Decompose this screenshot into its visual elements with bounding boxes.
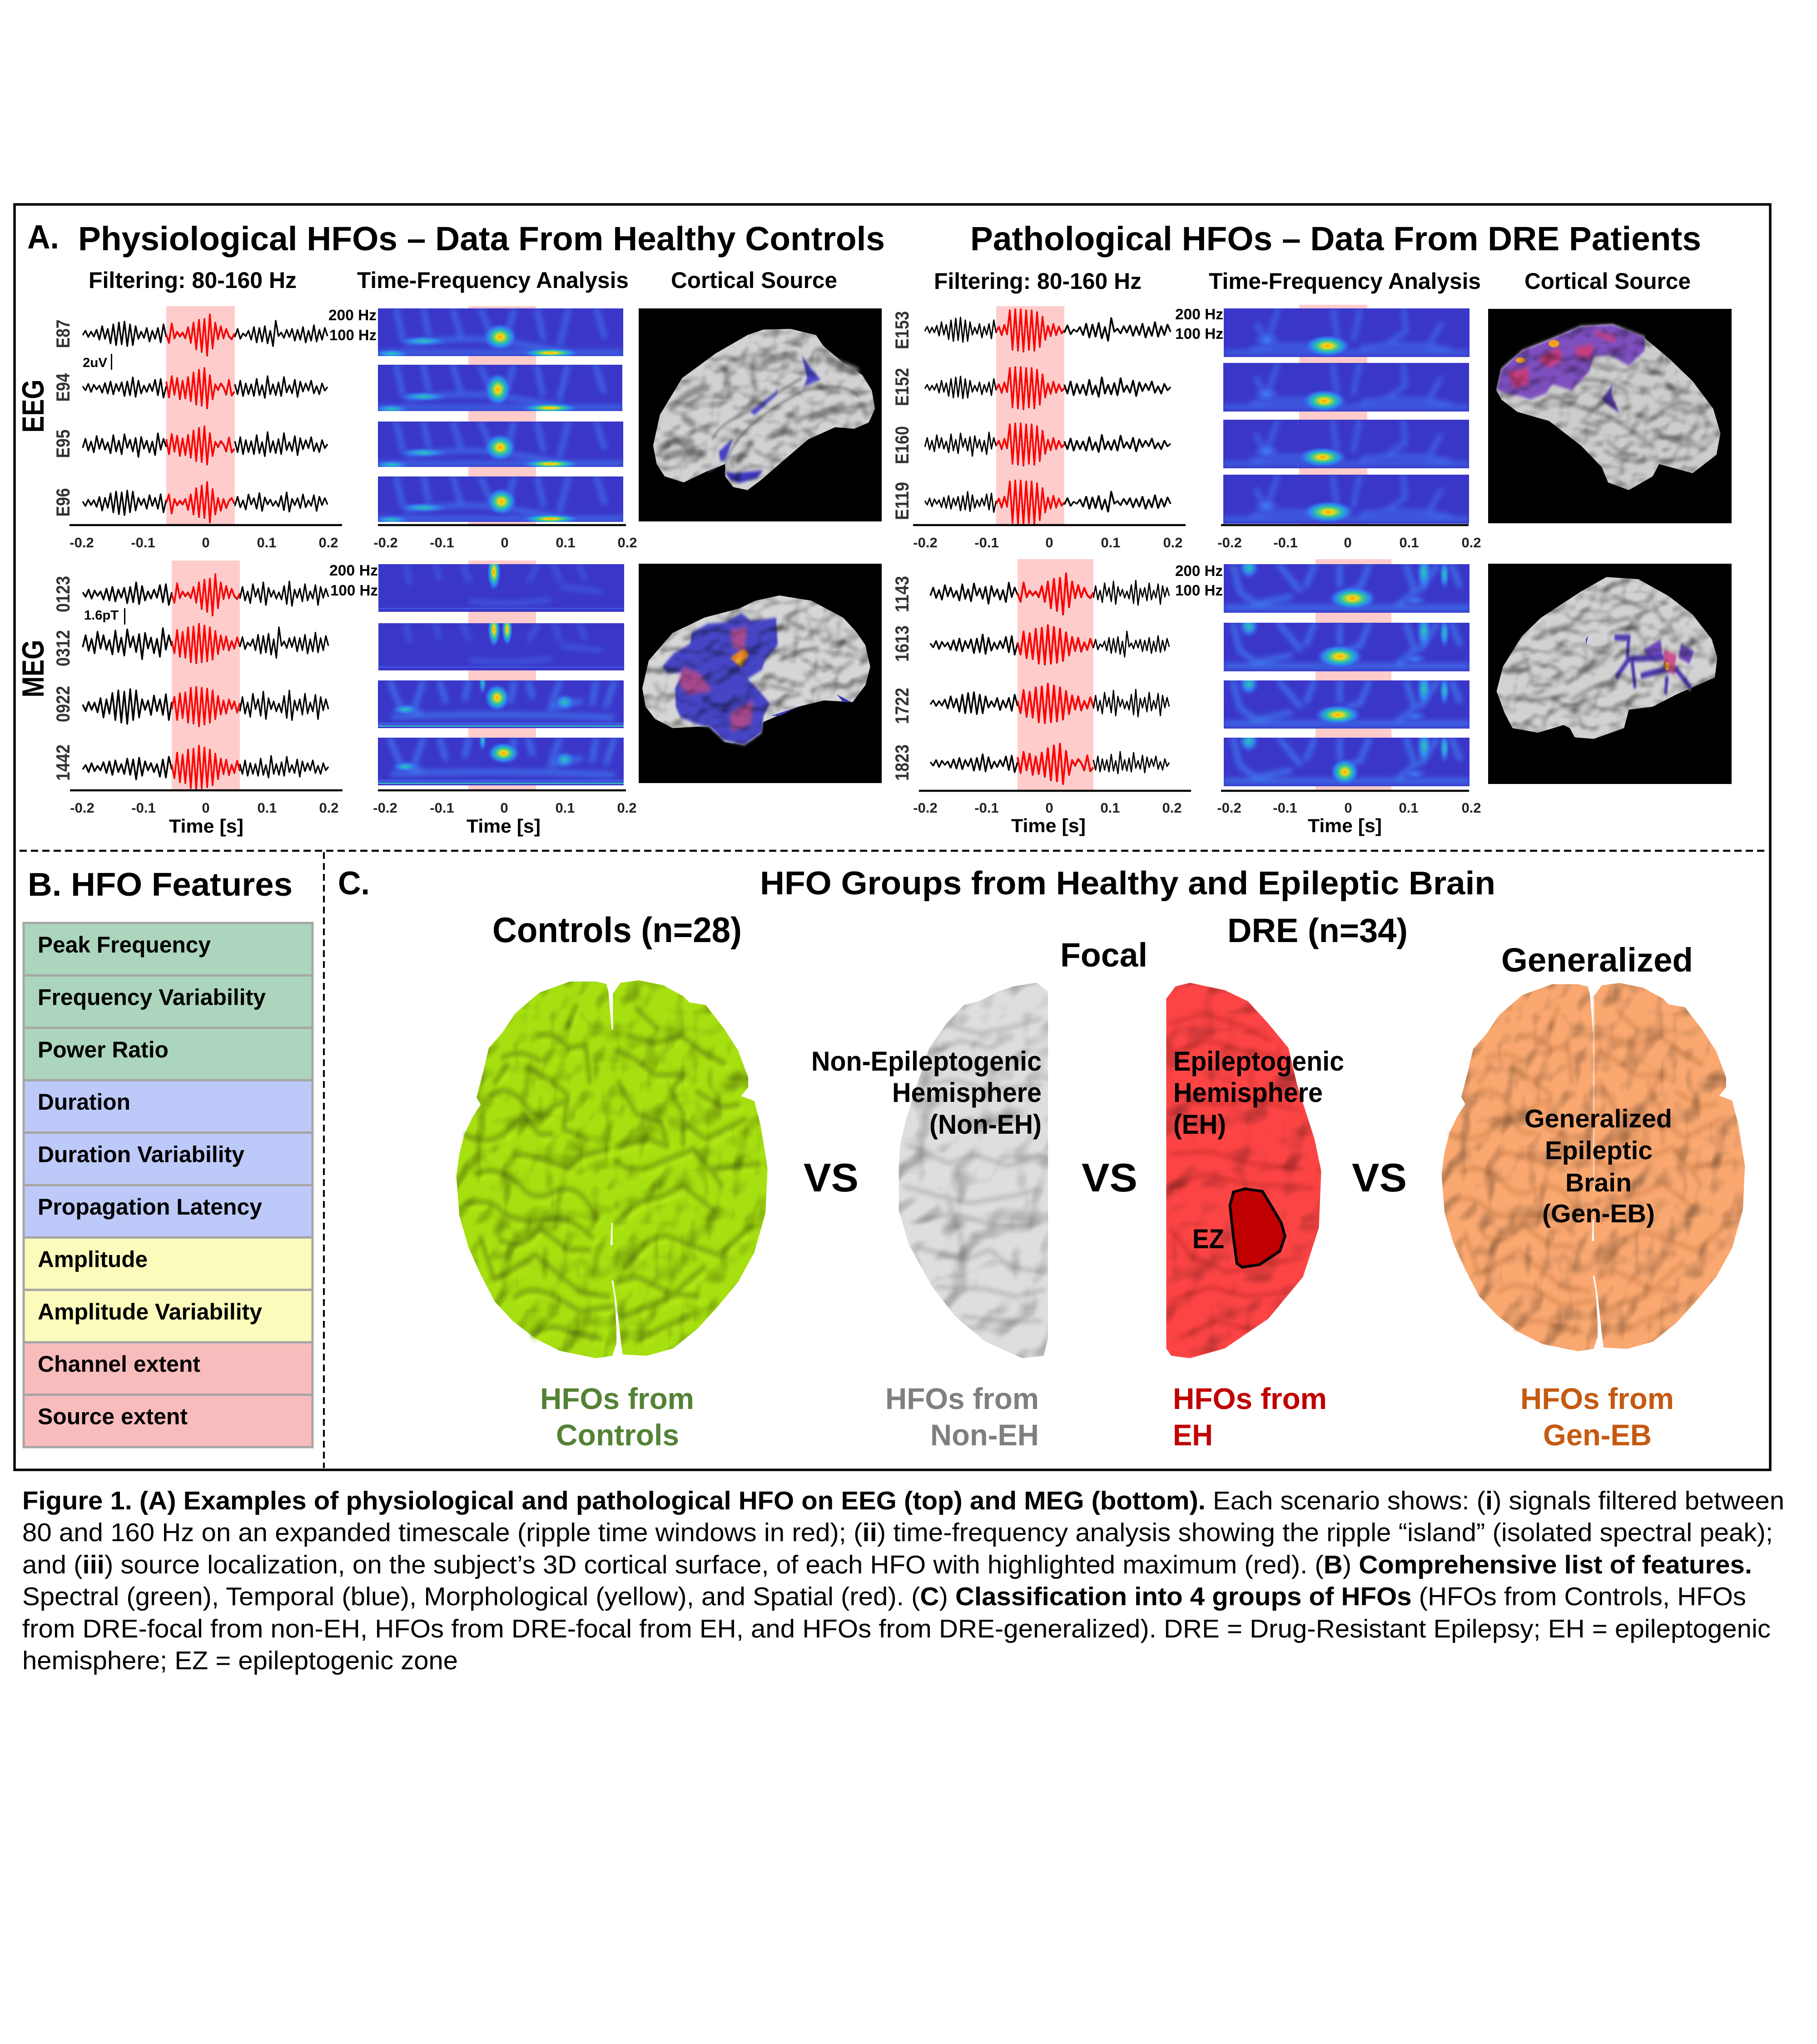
chart: time-frequency EEG physiological	[372, 308, 623, 525]
axis tick labels: 0	[202, 800, 210, 816]
column heads right: Cortical Source	[1524, 268, 1691, 294]
column heads left: Cortical Source	[671, 268, 837, 293]
panel letter A: A.	[27, 218, 59, 256]
axis tick labels: -0.2	[373, 535, 398, 551]
frequency labels: 200 Hz	[328, 307, 377, 323]
heading B: B. HFO Features	[28, 867, 293, 903]
channel labels: E96	[52, 488, 74, 517]
axis tick labels: 0	[1045, 535, 1053, 551]
label Gen-EB: (Gen-EB)	[1542, 1199, 1655, 1228]
frequency labels: 100 Hz	[330, 582, 378, 599]
axis tick labels: 0.1	[257, 535, 277, 551]
axis tick labels: -0.1	[430, 535, 454, 551]
heading: pathological HFOs: Pathological HFOs – Data From DRE Patients	[970, 220, 1701, 258]
axis tick labels: -0.1	[974, 535, 999, 551]
axis tick labels: -0.2	[913, 800, 938, 816]
axis tick labels: 0	[500, 800, 508, 816]
panel: B HFO features	[24, 867, 313, 1447]
axis tick labels: 0	[1344, 535, 1352, 551]
figure caption: hemisphere; EZ = epileptogenic zone	[22, 1646, 458, 1675]
scale bars: 1.6pT	[84, 608, 119, 623]
axis tick labels: 0.2	[1162, 800, 1182, 816]
channel labels: E94	[52, 373, 74, 402]
column heads left	[89, 268, 837, 293]
label Gen-EB: Brain	[1565, 1168, 1632, 1197]
channel labels: 0123	[52, 576, 74, 612]
axis tick labels	[70, 535, 1481, 816]
chart: time-frequency MEG pathological	[1224, 552, 1469, 786]
VS labels: VS	[1352, 1155, 1407, 1200]
axis tick labels: -0.1	[131, 800, 156, 816]
axis tick labels: 0.2	[1461, 535, 1481, 551]
ripple time windows (pink)	[166, 305, 1391, 791]
axis titles Time [s]: Time [s]	[169, 815, 243, 837]
axis tick labels: 0.2	[319, 800, 339, 816]
group caption non-EH	[885, 1382, 1039, 1452]
group caption Gen-EB	[1520, 1382, 1674, 1452]
group headers: Controls (n=28)	[492, 910, 742, 950]
panel letter C: C.	[338, 865, 370, 902]
chart: EEG pathological traces	[925, 309, 1171, 525]
axis tick labels: -0.2	[1217, 535, 1242, 551]
feature names: Source extent	[38, 1404, 188, 1429]
group headers: Focal	[1060, 936, 1147, 974]
group caption controls: Controls	[556, 1418, 679, 1452]
axis tick labels: 0.1	[556, 535, 576, 551]
figure caption: Spectral (green), Temporal (blue), Morphological (yellow), and Spatial (red). ( C) Classification into 4 groups of HFOs (HFOs from Controls, HFOs	[22, 1582, 1746, 1611]
group headers	[492, 910, 1693, 979]
label non-EH: Non-Epileptogenic	[811, 1046, 1042, 1077]
axis tick labels: 0.1	[1399, 800, 1419, 816]
column heads right: Filtering: 80-160 Hz	[934, 268, 1142, 294]
heading: physiological HFOs: Physiological HFOs – Data From Healthy Controls	[78, 220, 885, 258]
label EH: Epileptogenic	[1173, 1046, 1344, 1077]
axis tick labels: 0.1	[555, 800, 575, 816]
feature names: Power Ratio	[38, 1037, 169, 1062]
column heads left: Filtering: 80-160 Hz	[89, 268, 297, 293]
cortical source: EEG physiological brain	[639, 308, 882, 521]
frequency labels: 200 Hz	[1175, 562, 1223, 579]
frequency labels: 200 Hz	[329, 562, 378, 579]
figure caption: Figure 1. (A) Examples of physiological and pathological HFO on EEG (top) and MEG (bottom). Each scenario shows: (i) signals filtered between	[22, 1486, 1784, 1515]
axis tick labels: -0.1	[1273, 535, 1298, 551]
axis tick labels: 0	[202, 535, 210, 551]
column heads right: Time-Frequency Analysis	[1209, 268, 1481, 294]
channel labels: 1442	[52, 744, 74, 781]
EZ region	[1230, 1189, 1285, 1267]
axis titles Time [s]: Time [s]	[467, 815, 541, 837]
axis tick labels: 0.1	[1101, 535, 1121, 551]
channel labels: 1823	[891, 744, 913, 781]
axis tick labels: 0.2	[1163, 535, 1183, 551]
axis tick labels: -0.1	[131, 535, 155, 551]
axes lines	[70, 525, 1469, 791]
axis tick labels: -0.2	[913, 535, 938, 551]
group caption controls: HFOs from	[540, 1382, 694, 1415]
outer frame and section dividers	[15, 204, 1770, 1470]
chart: time-frequency MEG physiological	[378, 553, 624, 785]
group headers: DRE (n=34)	[1227, 912, 1408, 949]
axis tick labels: -0.1	[1273, 800, 1297, 816]
cortical source: MEG pathological brain	[1488, 564, 1732, 784]
feature names: Amplitude Variability	[38, 1299, 262, 1325]
channel labels	[52, 311, 913, 781]
column heads right	[934, 268, 1691, 294]
scale bars	[83, 354, 125, 625]
group caption non-EH: Non-EH	[930, 1418, 1039, 1452]
cortical source: MEG physiological brain	[639, 564, 882, 783]
scale bars: 2uV	[83, 356, 108, 370]
axis tick labels: 0	[1344, 800, 1352, 816]
cortical source: EEG pathological brain	[1488, 309, 1732, 523]
axis tick labels: 0.1	[257, 800, 277, 816]
VS labels: VS	[1082, 1155, 1137, 1200]
group caption EH: EH	[1173, 1418, 1213, 1452]
label non-EH	[811, 1046, 1042, 1140]
channel labels: 1613	[891, 625, 913, 662]
label Gen-EB: Epileptic	[1545, 1136, 1653, 1165]
heading C: HFO Groups from Healthy and Epileptic Brain	[760, 865, 1495, 902]
axis tick labels: 0.2	[1461, 800, 1481, 816]
axis tick labels: 0.1	[1399, 535, 1419, 551]
label Gen-EB	[1524, 1104, 1672, 1228]
axis tick labels: -0.1	[974, 800, 999, 816]
feature names: Propagation Latency	[38, 1194, 262, 1220]
column heads left: Time-Frequency Analysis	[357, 268, 629, 293]
axis tick labels: -0.2	[70, 535, 94, 551]
channel labels: E153	[891, 311, 913, 349]
frequency labels: 100 Hz	[329, 327, 377, 343]
group caption EH: HFOs from	[1173, 1382, 1327, 1415]
channel labels: 1722	[891, 688, 913, 724]
feature names: Duration	[38, 1089, 130, 1115]
feature names: Frequency Variability	[38, 984, 266, 1010]
group caption Gen-EB: Gen-EB	[1543, 1418, 1652, 1452]
panel: A physiological and pathological HFO examples	[16, 218, 1732, 837]
frequency labels: 200 Hz	[1175, 306, 1223, 322]
frequency labels	[328, 306, 1223, 599]
chart: MEG pathological traces	[930, 573, 1169, 784]
axis tick labels: 0.2	[318, 535, 338, 551]
channel labels: 1143	[891, 576, 913, 612]
axis tick labels: 0.2	[617, 535, 637, 551]
row label MEG: MEG	[16, 640, 50, 698]
feature names: Duration Variability	[38, 1142, 244, 1167]
frequency labels: 100 Hz	[1175, 325, 1223, 342]
axis tick labels: 0.2	[617, 800, 637, 816]
label EH: (EH)	[1173, 1109, 1226, 1140]
group caption controls	[540, 1382, 694, 1452]
figure caption: 80 and 160 Hz on an expanded timescale (ripple time windows in red); ( ii) time-frequency analysis showing the ripple “island” (isolated spectral peak);	[22, 1518, 1773, 1547]
channel labels: E87	[52, 320, 74, 348]
group caption EH	[1173, 1382, 1327, 1452]
axis tick labels: 0	[1045, 800, 1053, 816]
row label EEG: EEG	[16, 380, 50, 432]
axis tick labels: 0.1	[1100, 800, 1120, 816]
axis titles Time [s]: Time [s]	[1308, 815, 1382, 836]
brain: controls green	[456, 980, 768, 1358]
label non-EH: (Non-EH)	[929, 1109, 1042, 1140]
group caption Gen-EB: HFOs from	[1520, 1382, 1674, 1415]
axis titles Time [s]	[169, 815, 1382, 837]
label Gen-EB: Generalized	[1524, 1104, 1672, 1133]
feature names: Channel extent	[38, 1351, 200, 1377]
chart: MEG physiological traces	[83, 574, 328, 789]
axis tick labels: 0	[501, 535, 509, 551]
group headers: Generalized	[1501, 941, 1693, 979]
label EH	[1173, 1046, 1344, 1254]
VS labels: VS	[804, 1155, 859, 1200]
chart: time-frequency EEG pathological	[1223, 308, 1469, 524]
channel labels: E160	[891, 426, 913, 464]
feature table cells	[24, 923, 313, 1447]
channel labels: 0922	[52, 686, 74, 722]
channel labels: E152	[891, 368, 913, 406]
frequency labels: 100 Hz	[1175, 582, 1223, 599]
feature names: Peak Frequency	[38, 932, 211, 958]
chart: EEG physiological traces	[83, 314, 328, 522]
axis tick labels: -0.2	[1217, 800, 1241, 816]
panel: C HFO groups	[338, 865, 1745, 1452]
brain: epileptogenic hemisphere red	[1166, 983, 1321, 1358]
feature names	[38, 932, 266, 1429]
figure caption	[22, 1486, 1784, 1675]
axis tick labels: -0.1	[430, 800, 454, 816]
label EH: EZ	[1192, 1224, 1224, 1254]
brain: generalized orange	[1441, 983, 1745, 1351]
label EH: Hemisphere	[1173, 1077, 1323, 1108]
channel labels: E95	[52, 430, 74, 458]
axis tick labels: -0.2	[373, 800, 397, 816]
channel labels: 0312	[52, 630, 74, 666]
figure caption: and (iii) source localization, on the subject’s 3D cortical surface, of each HFO with highlighted maximum (red). ( B) Comprehensive list of features.	[22, 1550, 1752, 1579]
axis titles Time [s]: Time [s]	[1011, 815, 1086, 836]
feature names: Amplitude	[38, 1246, 148, 1272]
figure caption: from DRE-focal from non-EH, HFOs from DRE-focal from EH, and HFOs from DRE-generalized). DRE = Drug-Resistant Epilepsy; EH = epileptogenic	[22, 1614, 1771, 1643]
axis tick labels: -0.2	[70, 800, 94, 816]
brain: non-epileptogenic hemisphere gray	[899, 983, 1048, 1358]
label non-EH: Hemisphere	[892, 1077, 1042, 1108]
channel labels: E119	[891, 482, 913, 520]
group caption non-EH: HFOs from	[885, 1382, 1039, 1415]
VS labels	[804, 1155, 1407, 1200]
